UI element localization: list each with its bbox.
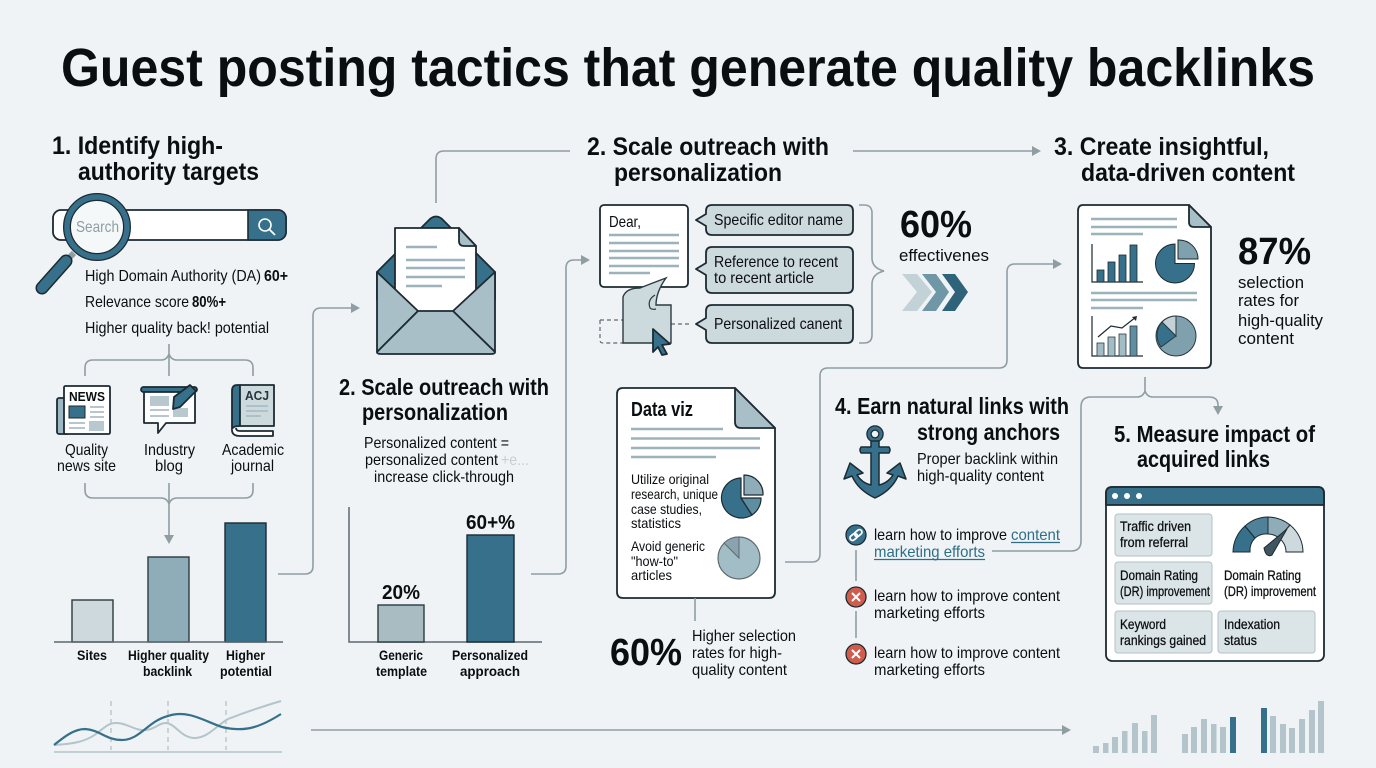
list item: good anchor [846,525,1061,561]
bar chart: backlink potential: Higher [226,647,265,663]
list item: good anchor: content [1011,527,1061,544]
document: data viz: "how-to" [631,553,678,569]
stat: 60% selection rates: 60% [610,632,682,674]
callout: personalized content [696,305,853,343]
document: data viz: Utilize original [631,471,709,487]
stat: 60% selection rates: quality content [692,662,788,679]
card: keyword rankings [1115,611,1212,653]
criteria list: High Domain Authority (DA) [85,268,261,285]
label: gauge: Domain Rating [1224,567,1301,583]
card: keyword rankings: rankings gained [1120,632,1206,648]
text: proper backlink [917,451,1058,485]
bar sparklines [1093,701,1324,753]
icon: academic journal [232,385,274,436]
heading: step 2 top [587,133,829,187]
criteria list: 80%+ [192,294,226,311]
text: proper backlink: high-quality content [917,468,1045,485]
arrow: bottom timeline [311,725,1071,735]
callout: specific editor name: Specific editor name [714,212,843,229]
stat: 87% selection rates: high-quality [1238,311,1323,330]
email mockup: Dear, [609,214,641,231]
document: data-driven report [1078,205,1211,368]
icon: anchor [844,428,906,498]
gauge [1233,517,1303,556]
card: indexation: status [1224,632,1257,648]
bar chart: generic vs personalized: 60+% [466,512,515,534]
heading: step 2 top: 2. Scale outreach with [587,133,829,161]
bracket arrow: site types to bar chart [85,483,253,544]
card: traffic [1115,514,1212,556]
heading: step 3: 3. Create insightful, [1054,133,1269,161]
pie chart: generic articles [718,537,760,579]
card: indexation [1218,611,1315,653]
callout: personalized content: Personalized canent [714,316,842,333]
document: data viz [617,388,775,598]
pie chart: report bottom [1156,316,1196,356]
label: gauge [1224,567,1316,599]
heading: step 1: authority targets [78,158,259,186]
heading: step 4: 4. Earn natural links with [835,393,1069,419]
text: personalized content: personalized content [365,452,498,469]
document: data viz: research, unique [631,486,718,502]
browser window dashboard [1106,487,1324,661]
heading: step 2 top: personalization [614,159,782,187]
document: data viz: statistics [631,515,681,531]
heading: step 3 [1054,133,1296,187]
stat: 60% effectiveness: effectivenes [899,246,989,265]
heading: step 5: acquired links [1137,446,1270,472]
heading: step 5: 5. Measure impact of [1114,421,1315,447]
label: academic journal: Academic [222,442,284,459]
heading: step 1 [52,132,259,186]
heading: step 2 left: personalization [362,399,508,425]
arrow: step 2 to step 3 [853,146,1041,156]
bar chart: generic vs personalized: approach [460,663,520,679]
heading: step 5 [1114,421,1315,472]
label: news site: Quality [65,442,108,459]
list item: bad anchor two: learn how to improve content [874,645,1060,662]
stat: 87% selection rates: rates for [1238,291,1299,310]
card: domain rating: (DR) improvement [1120,583,1210,599]
list item: bad anchor two: marketing efforts [874,662,985,679]
document: data viz: Data viz [631,399,693,421]
bar chart: report top [1092,244,1143,282]
icon: industry blog [141,385,197,433]
document: data viz: case studies, [631,501,702,517]
pie chart: report top [1156,240,1198,283]
text: personalized content: increase click-through [374,469,514,486]
text: proper backlink: Proper backlink within [917,451,1058,468]
card: domain rating [1115,562,1212,604]
list item: bad anchor one: learn how to improve content [874,588,1060,605]
document: data viz: Avoid generic [631,538,705,554]
stat: 60% effectiveness: 60% [900,204,972,246]
arrow: data viz to step 3 [785,259,1062,562]
card: traffic: from referral [1120,534,1188,550]
connector: item line [855,550,857,638]
heading: step 3: data-driven content [1081,159,1296,187]
icon: chevrons [902,274,968,311]
bar chart: backlink potential [54,523,283,679]
bar chart: generic vs personalized: Personalized [452,647,528,663]
heading: step 4: strong anchors [917,419,1060,445]
arrow: chart to envelope [278,303,360,574]
criteria list: Relevance score [85,294,189,311]
bracket: criteria to site types [85,344,253,376]
heading: step 4 [835,393,1069,445]
criteria list: 60+ [264,268,288,285]
callout: reference to recent article: Reference to recent [714,254,838,271]
icon: news site [57,386,110,434]
icon: academic journal: ACJ [245,389,269,403]
connector and bracket to step 5 [992,377,1223,551]
search bar with magnifier [42,197,286,288]
heading: step 2 left: 2. Scale outreach with [339,374,549,400]
line chart: decorative trend [54,701,282,752]
callout: reference to recent article: to recent article [714,270,814,287]
label: academic journal: journal [230,458,274,475]
stat: 87% selection rates: content [1238,329,1294,348]
bar chart: backlink potential: potential [220,663,272,679]
list item: bad anchor one [846,587,1060,622]
line and bar chart: report bottom [1092,316,1143,356]
label: news site: news site [57,458,116,475]
stem: data viz to stat [694,598,696,621]
pie chart: original research [721,475,763,518]
card: indexation: Indexation [1224,616,1280,632]
bar chart: generic vs personalized: template [376,663,427,679]
list item: bad anchor two [846,644,1060,679]
arrow: envelope to outreach heading [436,151,570,203]
stat: 60% selection rates: Higher selection [692,628,796,645]
title: Guest posting tactics that generate quality backlinks [61,38,1315,98]
heading: step 1: 1. Identify high- [52,132,223,160]
stat: 60% selection rates [610,628,796,679]
label: gauge: (DR) improvement [1224,583,1316,599]
label: industry blog: Industry [144,442,195,459]
arrow: chart to email mockup [531,255,590,574]
label: industry blog [144,442,195,475]
card: traffic: Traffic driven [1120,518,1191,534]
stat: 87% selection rates [1238,231,1323,348]
email mockup [600,205,690,355]
stat: 60% effectiveness [899,204,989,265]
icon: news site: NEWS [69,390,105,404]
criteria list: Higher quality back! potential [85,320,269,337]
bar chart: backlink potential: Higher quality [128,647,209,663]
callout: reference to recent article [696,247,853,293]
label: industry blog: blog [155,458,183,475]
list item: good anchor: learn how to improve [874,527,1007,544]
bar chart: backlink potential: backlink [143,663,192,679]
brace: callouts to effectiveness [859,205,884,343]
label: news site [57,442,116,475]
criteria list [85,268,288,337]
bar chart: generic vs personalized: Generic [379,647,423,663]
text: personalized content [364,435,529,486]
stat: 87% selection rates: 87% [1238,231,1311,273]
label: academic journal [222,442,284,475]
stat: 60% selection rates: rates for high- [692,645,782,662]
card: domain rating: Domain Rating [1120,567,1198,583]
list item: good anchor: marketing efforts [874,544,985,561]
list item: bad anchor one: marketing efforts [874,605,985,622]
callout: specific editor name [696,205,853,235]
heading: step 2 left [339,374,549,425]
bar chart: generic vs personalized [349,507,542,679]
stat: 87% selection rates: selection [1238,273,1304,292]
card: keyword rankings: Keyword [1120,616,1166,632]
text: personalized content: +e... [501,452,529,469]
icon: envelope with letter [377,216,495,354]
document: data viz: articles [631,567,672,583]
bar chart: generic vs personalized: 20% [382,582,420,604]
bar chart: backlink potential: Sites [77,647,107,663]
text: personalized content: Personalized content = [364,435,509,452]
search bar with magnifier: Search [76,219,119,236]
